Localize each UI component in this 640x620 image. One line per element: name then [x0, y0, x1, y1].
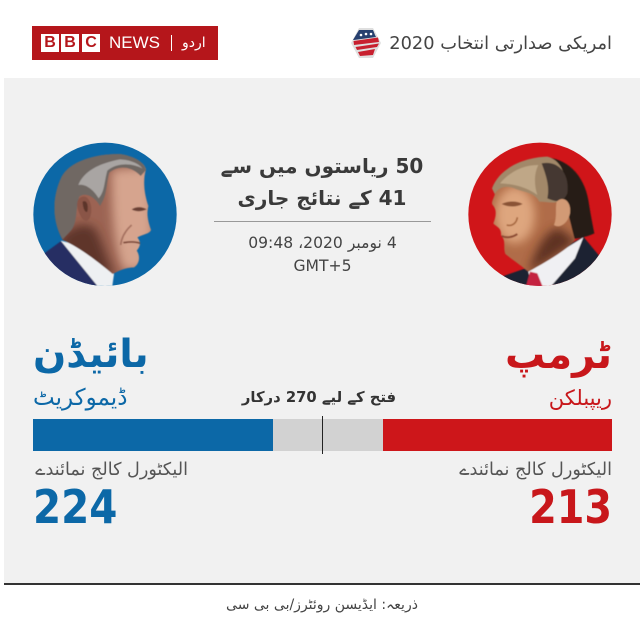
eye: [132, 207, 147, 211]
tie: [526, 272, 543, 287]
jacket: [503, 237, 599, 290]
marker: 270: [322, 416, 323, 454]
hair shadow: [542, 163, 568, 201]
NEWS wordmark: NEWS: [109, 33, 160, 52]
ear: [77, 196, 91, 221]
shirt collar: [61, 241, 114, 288]
cheek line: [121, 225, 132, 245]
eye: [502, 202, 523, 206]
face shading: [495, 187, 577, 273]
nose shadow: [507, 217, 517, 225]
timestamp: [248, 234, 397, 275]
hair: [54, 154, 146, 239]
label: 270 to win: فتح کے لیے 270 درکار: [242, 389, 396, 406]
timestamp: GMT+5: [293, 257, 352, 275]
hair highlight: [500, 165, 538, 195]
mouth: [123, 242, 140, 243]
jacket: [44, 240, 98, 286]
timestamp: 4 نومبر 2020، 09:48: [248, 234, 397, 252]
BBC blocks: B: [44, 34, 56, 51]
heading: results count: 41 کے نتائج جاری: [238, 186, 406, 210]
ear: [554, 199, 570, 226]
value: Biden 224: 224: [33, 480, 117, 534]
mouth: [502, 234, 517, 237]
divider: [214, 221, 431, 222]
source: ذریعہ: ایڈیسن روئٹرز/بی بی سی: [226, 597, 418, 613]
bar: Biden: [33, 419, 273, 451]
hair highlight: [78, 159, 143, 198]
bar: remaining: [273, 419, 384, 451]
icon: US flag hexagon: [351, 28, 381, 58]
dark back hair: [552, 158, 595, 240]
heading: results count: 50 ریاستوں میں سے: [221, 154, 423, 178]
bar: Trump: [383, 419, 612, 451]
BBC blocks: C: [85, 34, 97, 51]
BBC blocks: [41, 34, 100, 52]
heading: election 2020: امریکی صدارتی انتخاب 2020: [389, 33, 612, 54]
label: electoral college Trump: الیکٹورل کالج نمائندے: [459, 460, 612, 480]
name: Biden: بائیڈن: [33, 332, 149, 377]
Urdu label: اردو: [182, 35, 206, 51]
face and neck: [492, 182, 575, 272]
name: Trump: ٹرمپ: [505, 332, 612, 378]
party: Democrat: ڈیموکریٹ: [33, 385, 127, 411]
face shading: [62, 168, 152, 274]
party: Republican: ریپبلکن: [549, 386, 612, 410]
separator: [171, 35, 172, 51]
heading: results count: [221, 154, 423, 210]
BBC blocks: B: [64, 34, 76, 51]
logo: BBC News Urdu: [32, 26, 218, 60]
blond hair: [492, 157, 565, 202]
portrait: Biden: [33, 142, 177, 286]
label: electoral college Biden: الیکٹورل کالج نمائندے: [35, 460, 188, 480]
value: Trump 213: 213: [529, 480, 612, 534]
bar chart: electoral votes: [33, 416, 612, 454]
portrait: Trump: [468, 142, 612, 286]
shirt: [528, 237, 583, 287]
head and neck: [54, 154, 151, 274]
